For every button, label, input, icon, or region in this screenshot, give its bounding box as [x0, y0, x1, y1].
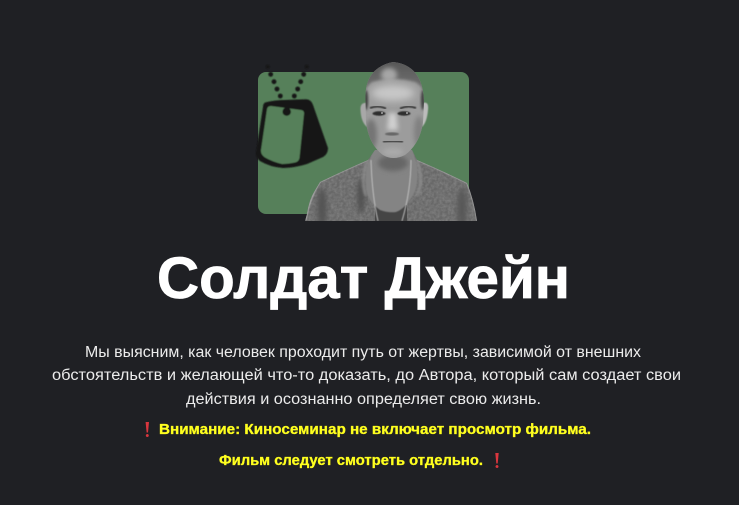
front tag face [261, 106, 304, 164]
tag hole [282, 108, 291, 116]
shirt interior [375, 205, 407, 221]
mouth [383, 140, 403, 143]
nose highlight [387, 113, 398, 130]
nose shadow [385, 132, 399, 136]
shirt [305, 150, 477, 221]
ball chain [266, 65, 309, 98]
hair [366, 62, 422, 90]
eyes and brows [370, 107, 416, 116]
shirt shading [316, 178, 468, 221]
icon: red exclamation [495, 453, 499, 468]
shoulder rim light [306, 160, 477, 221]
warning line 1 [146, 422, 591, 438]
warning text: Фильм следует смотреть отдельно. [219, 453, 483, 469]
description text: Мы выясним, как человек проходит путь от жертвы, зависимой от внешних [85, 344, 641, 361]
ears [360, 103, 367, 127]
cheek shadows [365, 119, 377, 151]
title: Солдат Джейн [157, 246, 570, 311]
warning line 2 [219, 453, 499, 469]
warning text: Внимание: Киносеминар не включает просмотр фильма. [159, 422, 591, 438]
description text: обстоятельств и желающей что-то доказать, до Автора, который сам создает свои [52, 367, 681, 384]
hero illustration [256, 60, 480, 228]
neck shadow [378, 155, 408, 171]
green panel [258, 72, 469, 214]
neck and chest [366, 148, 418, 212]
collar [363, 160, 420, 195]
forehead highlight [371, 85, 415, 101]
shirt texture [306, 154, 475, 221]
icon: red exclamation [146, 422, 149, 437]
photo: woman with shaved head [300, 60, 480, 228]
head [366, 62, 424, 158]
temple shadows [364, 90, 368, 110]
hair highlight [381, 68, 397, 82]
chin [385, 148, 401, 156]
necklace [371, 160, 411, 221]
tag silhouette [256, 99, 328, 168]
icon: dog tags [256, 65, 328, 168]
description text: действия и осознанно определяет свою жизнь. [186, 391, 541, 408]
description text [52, 344, 681, 408]
